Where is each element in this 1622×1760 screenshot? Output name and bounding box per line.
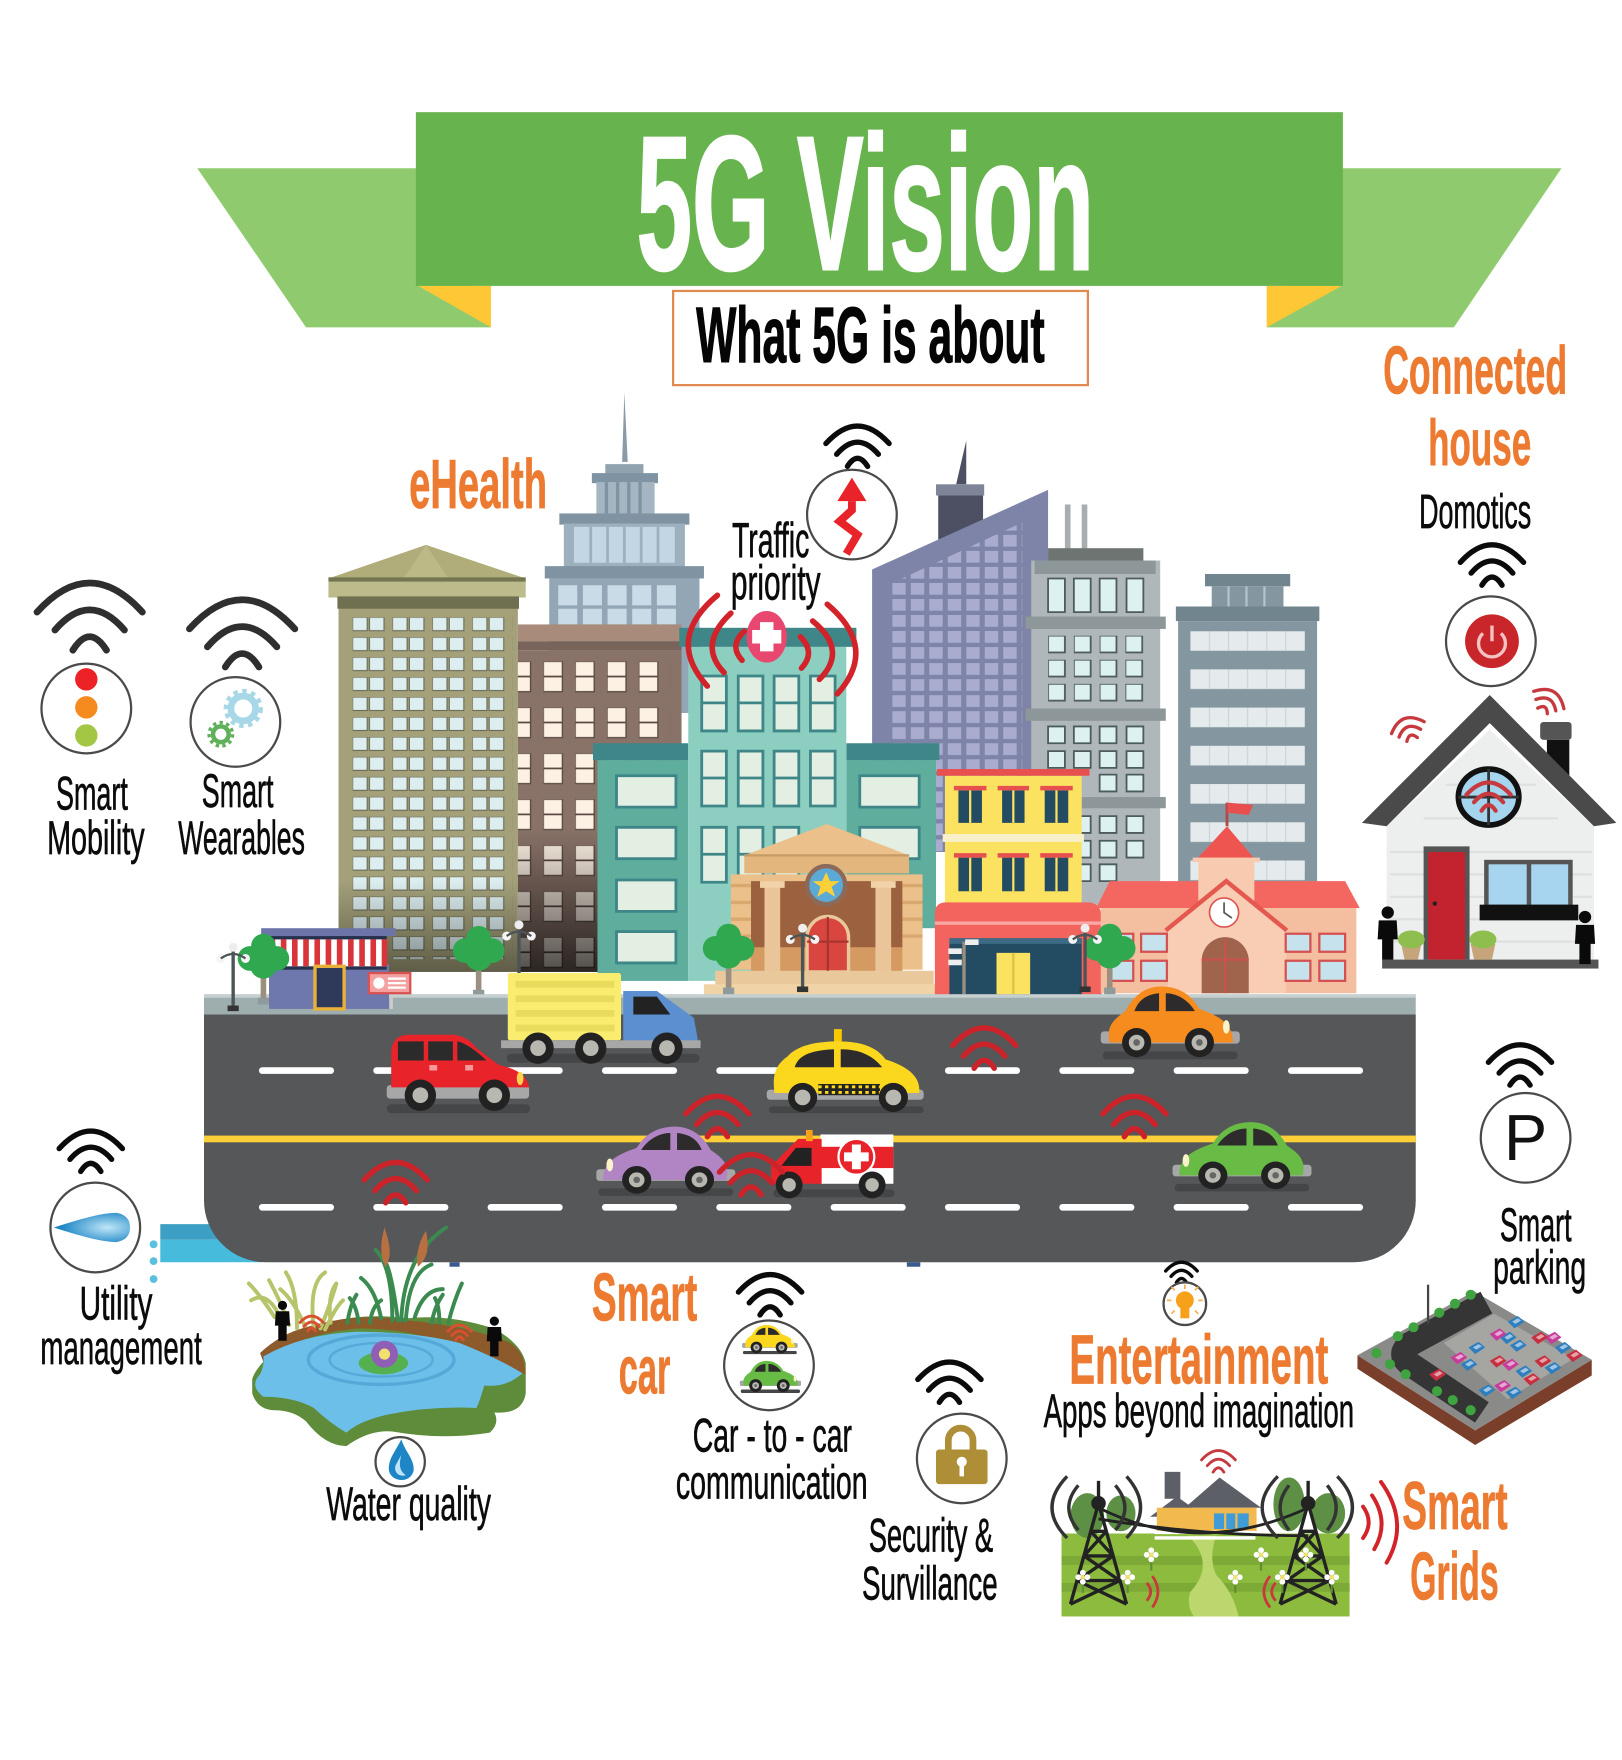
store with awning bbox=[261, 928, 410, 1009]
wifi icon bbox=[37, 583, 142, 650]
title: 5G Vision bbox=[637, 98, 1094, 310]
label: smart mobility: Mobility bbox=[47, 811, 145, 864]
label: smart parking: Smart bbox=[1500, 1198, 1572, 1251]
label: utility management bbox=[40, 1276, 202, 1374]
heading: smart car bbox=[592, 1261, 697, 1408]
building: light grey tower bbox=[1026, 504, 1166, 908]
road bbox=[204, 994, 1416, 1267]
heading: smart car: car bbox=[619, 1333, 670, 1408]
smart wearables group bbox=[178, 600, 305, 864]
vehicle: taxi bbox=[767, 1029, 924, 1113]
label: traffic priority: priority bbox=[731, 556, 821, 611]
label: utility management: Utility bbox=[80, 1276, 153, 1329]
icon: parking P bbox=[1481, 1093, 1570, 1183]
icon: power button bbox=[1446, 596, 1536, 686]
banner right tail bbox=[1267, 168, 1561, 327]
label: security and survillance bbox=[862, 1508, 998, 1610]
water pipe bbox=[150, 1224, 261, 1283]
grid house signal bbox=[1202, 1451, 1235, 1472]
label: smart wearables: Wearables bbox=[178, 811, 305, 864]
building: purple skyscraper bbox=[872, 441, 1048, 852]
wifi icon bbox=[918, 1362, 981, 1402]
label: domotics: Domotics bbox=[1419, 485, 1531, 539]
building: temple bbox=[704, 824, 947, 994]
label: smart wearables bbox=[178, 764, 305, 864]
icon: parking P: P bbox=[1504, 1101, 1547, 1174]
tree and lamp by store bbox=[216, 934, 289, 1011]
heading: entertainment: Entertainment bbox=[1069, 1320, 1328, 1398]
wifi icon bbox=[189, 600, 295, 667]
icon: light bulb bbox=[1164, 1282, 1206, 1325]
reeds bbox=[249, 1227, 462, 1329]
heading: smart car: Smart bbox=[592, 1261, 697, 1336]
smart mobility group bbox=[37, 583, 145, 864]
smart grids group bbox=[1052, 1451, 1508, 1616]
label: smart wearables: Smart bbox=[202, 764, 274, 817]
label: water quality: Water quality bbox=[326, 1477, 491, 1530]
heading: connected house bbox=[1383, 334, 1567, 479]
title banner bbox=[197, 98, 1561, 327]
building: school bbox=[1096, 803, 1360, 993]
vehicle: ambulance bbox=[771, 1130, 895, 1198]
house signal icons bbox=[1388, 683, 1569, 745]
wifi icon bbox=[1488, 1045, 1552, 1085]
wifi icon bbox=[738, 1275, 802, 1315]
heading: connected house: house bbox=[1428, 406, 1531, 479]
smart grid illustration bbox=[1052, 1472, 1352, 1616]
grid signal arcs bbox=[1363, 1482, 1397, 1563]
heading: smart grids: Grids bbox=[1410, 1540, 1499, 1615]
banner left fold bbox=[418, 286, 491, 327]
smart parking group bbox=[1357, 1045, 1592, 1445]
label: car to car communication: communication bbox=[676, 1456, 868, 1509]
label: traffic priority: Traffic bbox=[732, 513, 809, 568]
subtitle box bbox=[673, 291, 1088, 385]
label: smart parking bbox=[1493, 1198, 1586, 1294]
banner main band bbox=[416, 112, 1343, 286]
tower signal arcs bbox=[1052, 1476, 1352, 1538]
water quality group bbox=[249, 1227, 526, 1530]
vehicle: purple car bbox=[596, 1127, 735, 1196]
road signal: between cars bbox=[719, 1155, 783, 1195]
label: car to car communication: Car - to - car bbox=[693, 1409, 852, 1462]
icon: traffic arrow bbox=[807, 470, 897, 559]
building: grey-blue tower bbox=[545, 392, 704, 713]
vehicle: green car bbox=[1173, 1122, 1311, 1191]
building: blue-grey tower bbox=[1176, 574, 1319, 901]
vehicle: truck bbox=[501, 973, 701, 1064]
wifi icon bbox=[826, 426, 889, 466]
building: olive tower bbox=[328, 545, 526, 972]
banner right fold bbox=[1267, 286, 1342, 327]
road signal icons bbox=[364, 1028, 1166, 1203]
trees and street lamps bbox=[453, 920, 1136, 997]
heading: smart grids: Smart bbox=[1402, 1469, 1508, 1544]
vehicle: orange car bbox=[1101, 986, 1240, 1059]
building: yellow shop bbox=[935, 769, 1102, 994]
label: traffic priority bbox=[731, 513, 821, 611]
icon: car to car bbox=[724, 1321, 814, 1410]
wifi icon bbox=[1460, 545, 1524, 585]
wifi icon bbox=[1166, 1262, 1197, 1282]
vehicle: red van bbox=[387, 1035, 530, 1113]
hospital signal arcs bbox=[688, 595, 856, 694]
building: hospital bbox=[593, 595, 939, 981]
utility management group bbox=[40, 1131, 202, 1374]
hospital cross sign bbox=[747, 611, 787, 663]
icon: gears bbox=[191, 677, 280, 767]
building: brown tower bbox=[518, 624, 682, 972]
label: smart mobility: Smart bbox=[56, 766, 128, 819]
wifi icon bbox=[59, 1131, 122, 1171]
icon: traffic lights bbox=[41, 664, 131, 753]
icon: water drop bbox=[376, 1437, 425, 1486]
label: utility management: management bbox=[40, 1321, 202, 1374]
smart car group bbox=[592, 1261, 868, 1509]
banner left tail bbox=[197, 168, 491, 327]
label: smart mobility bbox=[47, 766, 145, 864]
label: security and survillance: Security & bbox=[869, 1508, 993, 1561]
label: car to car communication bbox=[676, 1409, 868, 1509]
label: eHealth: eHealth bbox=[409, 445, 547, 523]
security group bbox=[862, 1362, 1007, 1610]
icon: water jet bbox=[50, 1183, 140, 1272]
label: apps beyond imagination: Apps beyond imagination bbox=[1044, 1384, 1354, 1437]
entertainment group bbox=[1044, 1262, 1354, 1437]
city skyline bbox=[328, 392, 1360, 997]
connected house group bbox=[1362, 334, 1616, 969]
pond illustration bbox=[249, 1227, 526, 1446]
traffic priority group bbox=[731, 426, 897, 611]
heading: smart grids bbox=[1402, 1469, 1508, 1615]
icon: padlock bbox=[917, 1414, 1007, 1503]
parking lot illustration bbox=[1357, 1285, 1592, 1445]
house illustration bbox=[1362, 695, 1616, 969]
label: security and survillance: Survillance bbox=[862, 1557, 998, 1610]
subtitle box: What 5G is about bbox=[696, 291, 1045, 379]
